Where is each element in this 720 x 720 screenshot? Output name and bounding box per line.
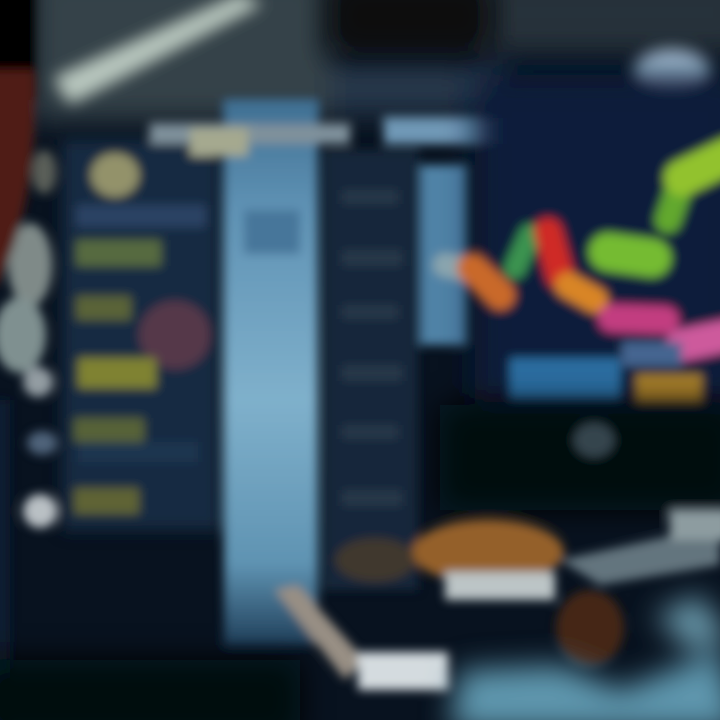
foreground sleeve xyxy=(0,595,720,720)
hand and sleeve xyxy=(275,585,624,690)
line chart: multi-colour trend xyxy=(445,155,720,345)
dark monitor base xyxy=(440,405,720,510)
panel: chart area xyxy=(475,75,720,405)
heading bar (illegible blurred title) xyxy=(150,118,564,156)
ceiling light strip xyxy=(54,0,262,104)
panel: dark centre column xyxy=(324,150,418,590)
desk: orange surface xyxy=(412,520,564,584)
ceiling xyxy=(30,0,720,120)
ceiling light right xyxy=(634,50,710,94)
table rows xyxy=(74,205,211,514)
dark ceiling fixture xyxy=(330,0,490,52)
desk: white paper xyxy=(445,510,720,600)
panel: light blue column xyxy=(224,100,318,645)
panel: left table xyxy=(62,140,220,530)
person silhouette left xyxy=(0,0,38,720)
centre rows xyxy=(342,190,402,506)
desk: brown left xyxy=(335,538,415,582)
small monitor glow xyxy=(574,423,614,457)
panel: left markers xyxy=(0,150,139,528)
panel: light blue side strip xyxy=(420,165,466,345)
column header block xyxy=(244,210,300,254)
chart lower bars xyxy=(510,342,702,402)
